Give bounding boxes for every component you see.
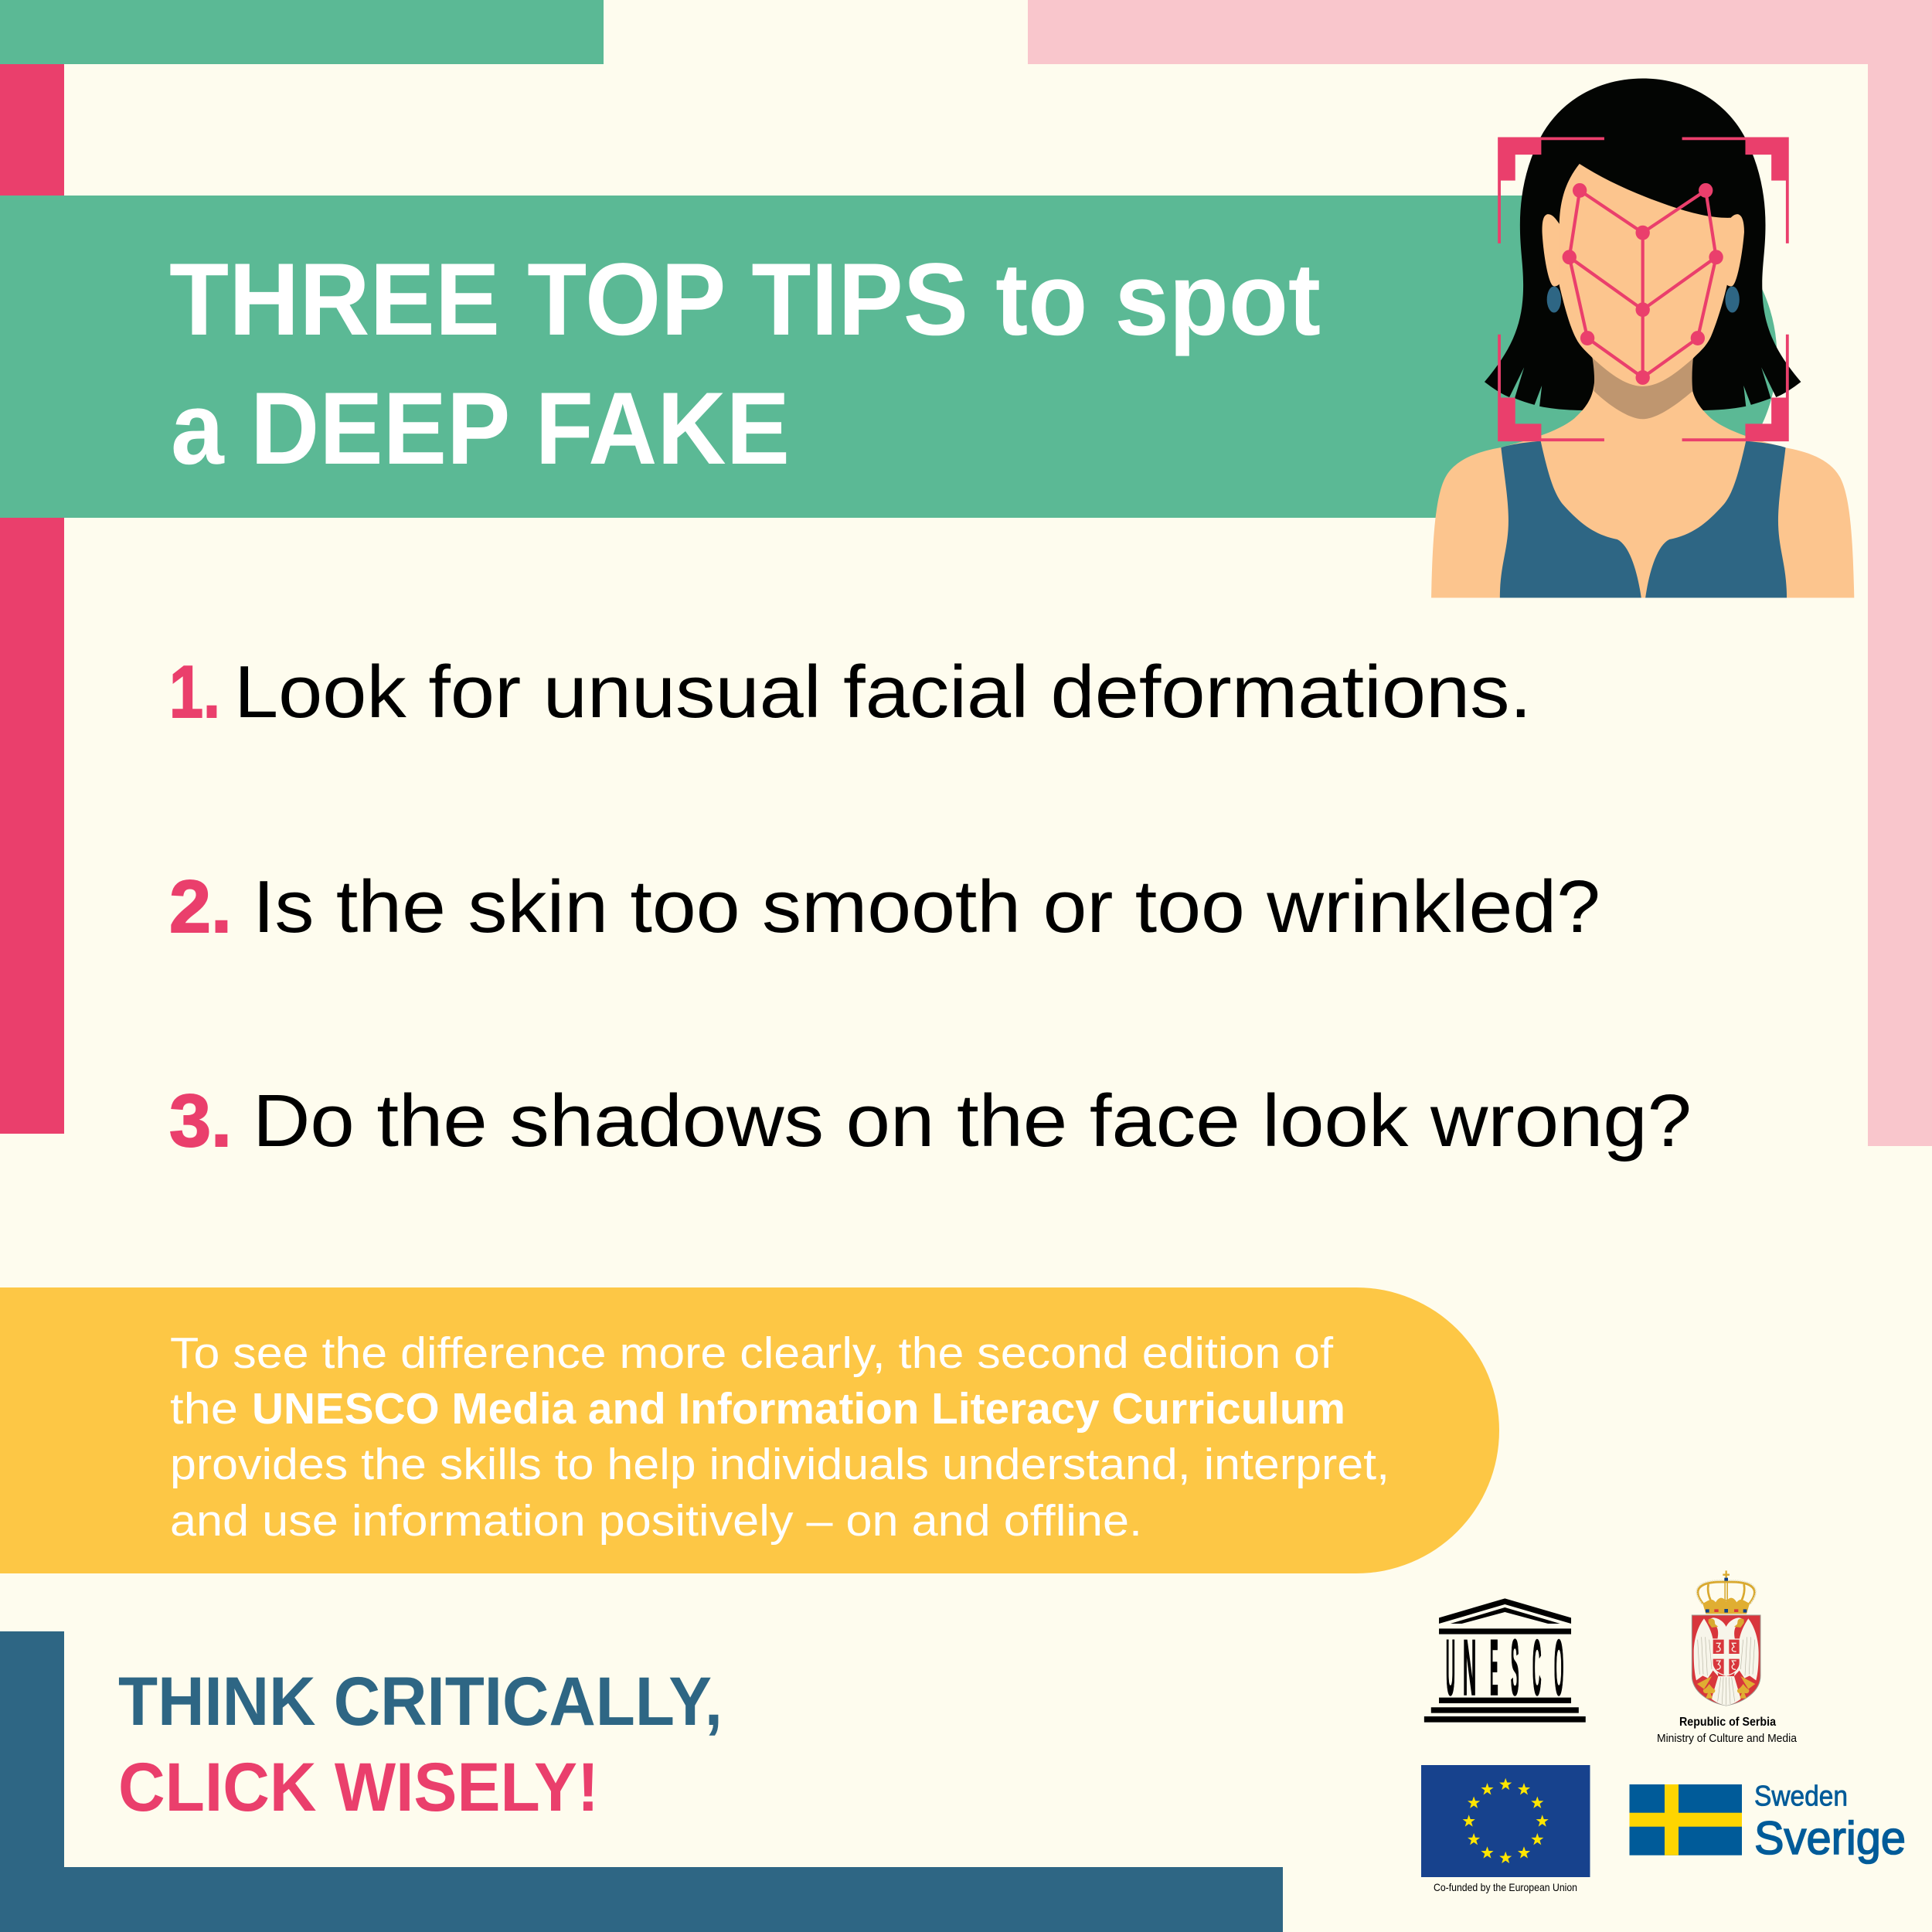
EU label: Co-funded by the European Union [1434, 1881, 1577, 1893]
title: THREE TOP TIPS to spot [169, 243, 1321, 357]
logo: Republic of Serbia crest [1692, 1570, 1760, 1706]
Republic of Serbia label: Republic of Serbia [1679, 1716, 1776, 1729]
logo: UNESCO: C [1532, 1624, 1541, 1712]
right wing [1734, 1618, 1759, 1680]
tail [1712, 1676, 1741, 1706]
Ministry label: Ministry of Culture and Media [1657, 1732, 1798, 1745]
mesh nodes [1563, 183, 1723, 385]
left ear [1543, 214, 1560, 286]
logo: Sweden flag [1629, 1784, 1742, 1855]
tip 2: Is the skin too smooth or too wrinkled? [253, 866, 1600, 948]
face mesh [1570, 190, 1716, 377]
slogan [118, 1662, 723, 1825]
slogan: CLICK WISELY! [118, 1748, 599, 1825]
callout text: UNESCO Media and Information Literacy Curriculum [252, 1384, 1345, 1434]
neck shadow [1592, 356, 1693, 419]
title [169, 243, 1321, 486]
logo: EU flag [1421, 1765, 1590, 1877]
logo: UNESCO: E [1490, 1624, 1498, 1712]
frame: red left bar [0, 64, 64, 1134]
Sweden wordmark [1754, 1781, 1906, 1864]
logo: UNESCO: O [1554, 1624, 1563, 1712]
callout text: and use information positively – on and offline. [170, 1496, 1142, 1546]
Sweden wordmark: Sweden [1754, 1781, 1848, 1811]
eagle beaks [1709, 1618, 1744, 1628]
logo: UNESCO: S [1511, 1624, 1519, 1712]
title banner [0, 196, 1777, 518]
callout text: To see the difference more clearly, the second edition of [170, 1328, 1333, 1378]
tip 2: 2. [169, 866, 232, 948]
inner shield [1713, 1639, 1740, 1675]
crown arches [1696, 1570, 1756, 1604]
callout text: provides the skills to help individuals understand, interpret, [170, 1440, 1389, 1489]
eagle heads and neck [1709, 1617, 1743, 1639]
frame: pink top and right corner [1028, 0, 1932, 1146]
callout text: the [170, 1384, 238, 1434]
tip 3: Do the shadows on the face look wrong? [253, 1080, 1692, 1162]
left wing [1694, 1618, 1718, 1680]
illustration: woman with face-scan mesh [1431, 79, 1854, 598]
top: right side [1645, 441, 1787, 598]
title: a DEEP FAKE [171, 372, 790, 486]
hair [1485, 79, 1801, 410]
frame: blue bottom-left corner [0, 1631, 1283, 1932]
claws and fleurs-de-lis [1697, 1676, 1755, 1699]
tip 1: Look for unusual facial deformations. [234, 651, 1532, 733]
shield [1692, 1615, 1760, 1706]
logo: UNESCO [1424, 1598, 1586, 1723]
wing feathers [1698, 1637, 1755, 1675]
white cross [1713, 1639, 1740, 1675]
body and neck [1431, 338, 1854, 598]
right earring [1725, 287, 1740, 312]
logo: UNESCO: N [1463, 1623, 1476, 1712]
crown base [1702, 1598, 1750, 1614]
top: left side [1500, 441, 1641, 598]
face [1560, 164, 1731, 386]
fire-steel ornaments [1716, 1643, 1736, 1669]
callout text [170, 1328, 1389, 1546]
left earring [1547, 287, 1561, 312]
tip 1: 1. [169, 651, 220, 733]
callout panel [0, 1287, 1499, 1573]
frame: top green bar [0, 0, 604, 64]
Sweden wordmark: Sverige [1754, 1812, 1906, 1864]
right ear [1725, 214, 1744, 286]
logo: UNESCO: U [1446, 1624, 1455, 1712]
slogan: THINK CRITICALLY, [118, 1662, 723, 1740]
tip 3: 3. [169, 1080, 232, 1162]
scan brackets [1498, 138, 1789, 441]
